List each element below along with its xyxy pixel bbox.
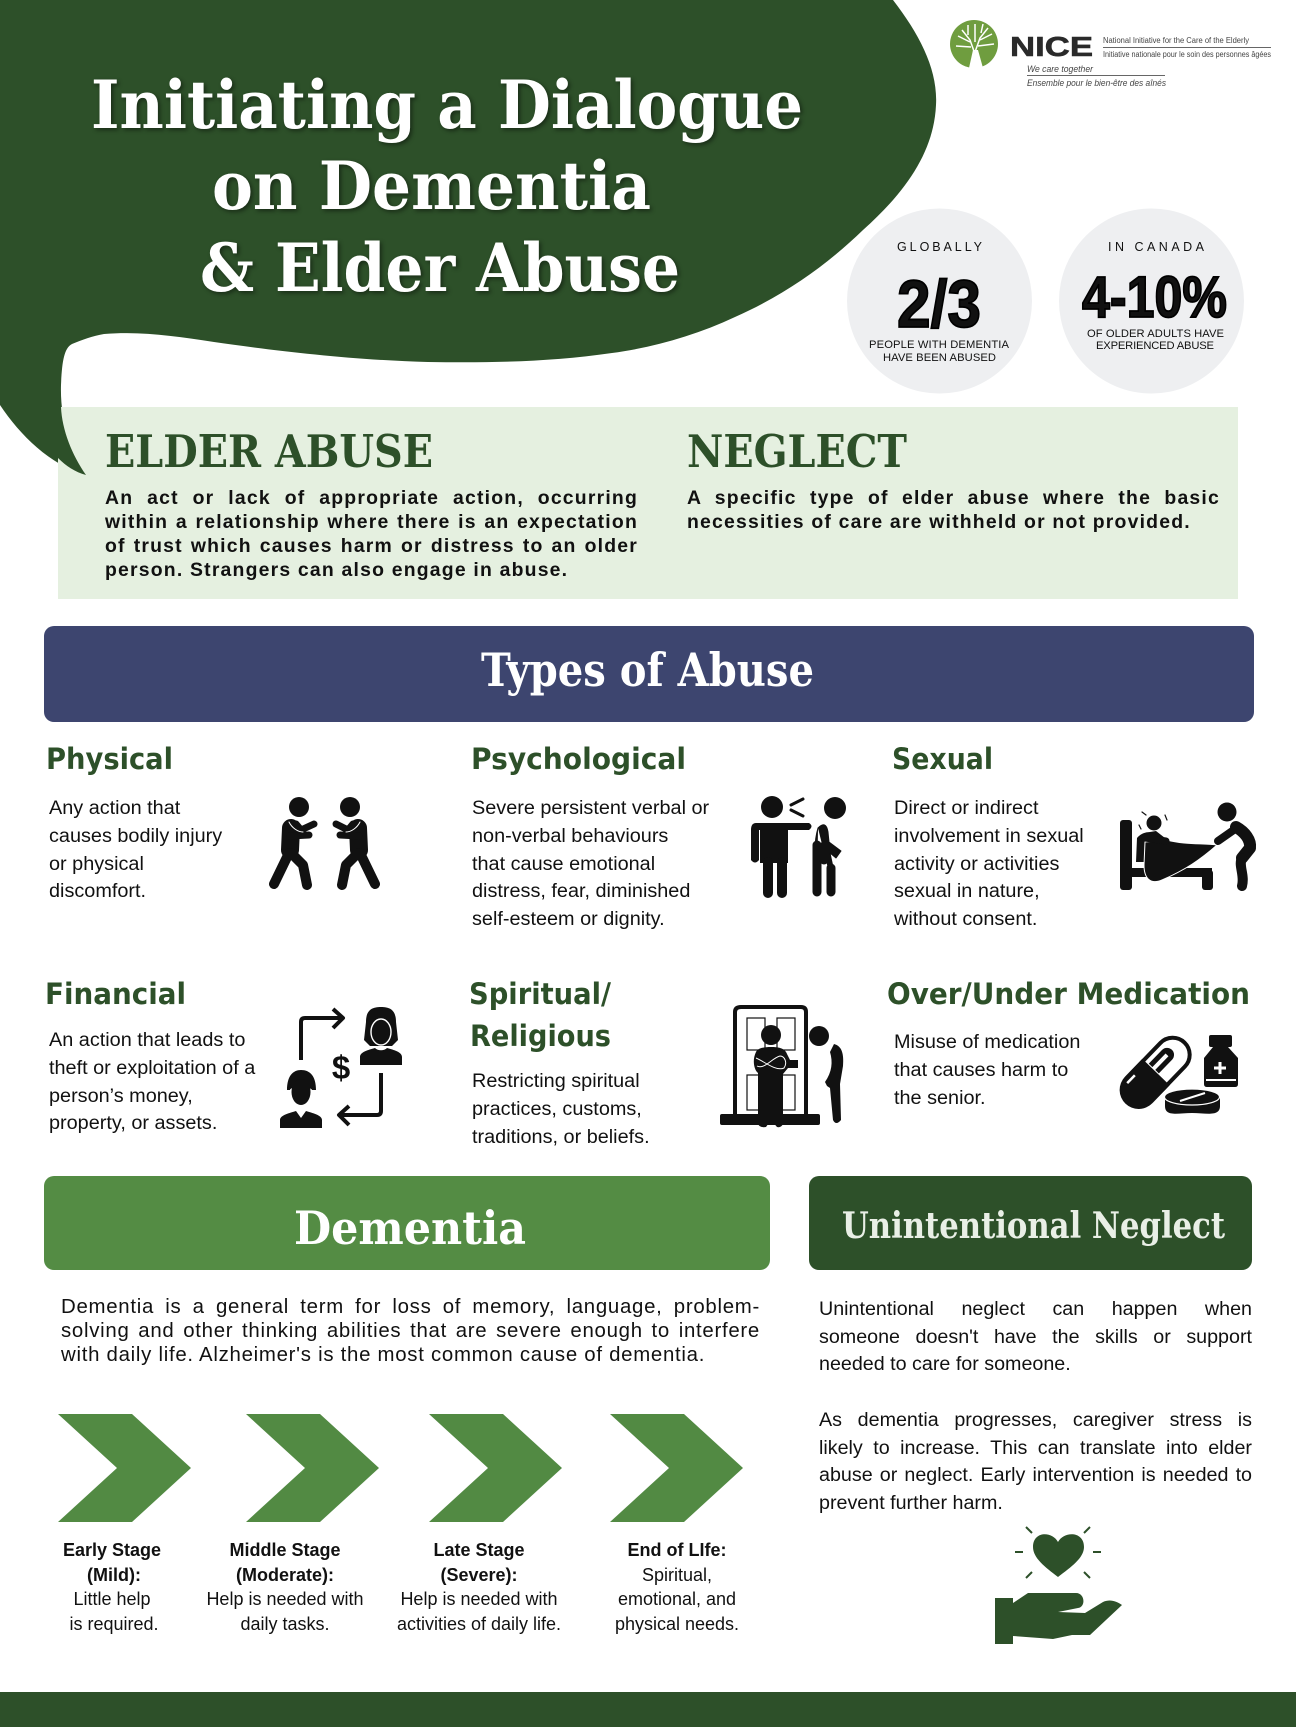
text: neglect definition: A specific type of elder abuse where the basic <box>687 487 1220 509</box>
text: physical: Any action that <box>49 797 180 819</box>
NICE logo: Initiative nationale pour le soin des personnes âgées <box>1103 50 1271 59</box>
stat circle: in Canada: OF OLDER ADULTS HAVE <box>1087 328 1224 340</box>
NICE logo <box>950 20 1271 88</box>
NICE logo: Ensemble pour le bien-être des aînés <box>1027 78 1166 88</box>
dementia banner <box>44 1176 770 1270</box>
stage: end of life: End of LIfe: <box>628 1540 726 1560</box>
text: spiritual <box>472 1070 650 1148</box>
heading: over/under medication: Over/Under Medication <box>887 977 1250 1011</box>
heading: physical: Physical <box>46 742 173 776</box>
text: unintentional neglect <box>819 1298 1252 1514</box>
stage: middle: Help is needed with <box>206 1589 364 1609</box>
text: physical: discomfort. <box>49 880 146 902</box>
text: sexual: activity or activities <box>894 853 1059 875</box>
stage: early <box>63 1540 161 1634</box>
stage: late: Help is needed with <box>400 1589 558 1609</box>
text: unintentional neglect: needed to care for someone. <box>819 1353 1071 1375</box>
text: elder abuse definition: person. Strangers can also engage in abuse. <box>105 559 568 581</box>
text: sexual: without consent. <box>894 908 1037 930</box>
text: financial: property, or assets. <box>49 1112 217 1134</box>
heading: psychological: Psychological <box>471 742 686 776</box>
arrow: late stage <box>429 1414 562 1522</box>
text: physical <box>49 797 222 902</box>
text: psychological: self-esteem or dignity. <box>472 908 665 930</box>
footer band <box>0 1692 1296 1727</box>
stat circle: globally: 2/3 <box>897 267 981 342</box>
arrow: end of life <box>610 1414 743 1522</box>
title: on Dementia <box>212 147 651 225</box>
text: elder abuse definition: An act or lack of appropriate action, occurring <box>105 487 638 509</box>
title: & Elder Abuse <box>200 229 680 307</box>
heading: spiritual / religious <box>469 977 611 1053</box>
text: spiritual: Restricting spiritual <box>472 1070 640 1092</box>
stat circle: globally: PEOPLE WITH DEMENTIA <box>869 339 1010 351</box>
text: elder abuse definition: of trust which causes harm or distress to an older <box>105 535 638 557</box>
heading: financial: Financial <box>45 977 186 1011</box>
types of abuse banner: Types of Abuse <box>481 643 814 697</box>
text: financial <box>49 1029 256 1134</box>
stage: late: activities of daily life. <box>397 1614 561 1634</box>
text: spiritual: traditions, or beliefs. <box>472 1126 650 1148</box>
text: physical: or physical <box>49 853 144 875</box>
heading: neglect: NEGLECT <box>687 425 907 478</box>
icon: person shouting at another <box>751 796 846 893</box>
arrow: early stage <box>58 1414 191 1522</box>
definitions panel background <box>58 407 1238 599</box>
icon: heart above open hand <box>995 1527 1122 1644</box>
text: financial: An action that leads to <box>49 1029 245 1051</box>
stat circle: in Canada: EXPERIENCED ABUSE <box>1096 340 1214 352</box>
stat circle: globally: GLOBALLY <box>897 240 983 254</box>
stage: middle: daily tasks. <box>240 1614 330 1634</box>
text: unintentional neglect: abuse or neglect. Early intervention is needed to <box>819 1464 1252 1486</box>
text: medication: the senior. <box>894 1087 986 1109</box>
text: dementia definition <box>61 1296 760 1366</box>
text: unintentional neglect: prevent further harm. <box>819 1492 1003 1514</box>
speech bubble header shape <box>0 0 936 475</box>
heading: elder abuse: ELDER ABUSE <box>105 425 433 478</box>
text: psychological: distress, fear, diminished <box>472 880 690 902</box>
stage: end of life: emotional, and <box>618 1589 736 1609</box>
dementia banner: Dementia <box>294 1201 526 1255</box>
stage: middle: (Moderate): <box>236 1565 334 1585</box>
text: sexual: involvement in sexual <box>894 825 1084 847</box>
stat circle: in Canada: 4-10% <box>1082 265 1227 330</box>
text: unintentional neglect: someone doesn't have the skills or support <box>819 1326 1252 1348</box>
text: dementia definition: Dementia is a general term for loss of memory, language, problem- <box>61 1296 760 1318</box>
text: neglect definition <box>687 487 1220 533</box>
heading: spiritual / religious: Spiritual/ <box>469 977 611 1011</box>
stage: late <box>397 1540 561 1634</box>
icon: person blocking door <box>720 1007 843 1127</box>
stage: early: (Mild): <box>87 1565 141 1585</box>
stage: end of life <box>615 1540 739 1634</box>
icon: two people fighting <box>274 797 375 885</box>
text: unintentional neglect: Unintentional neglect can happen when <box>819 1298 1252 1320</box>
text: dementia definition: with daily life. Alzheimer's is the most common cause of dementia. <box>61 1344 705 1366</box>
text: psychological: Severe persistent verbal or <box>472 797 709 819</box>
text: psychological <box>472 797 709 930</box>
NICE logo: We care together <box>1027 64 1094 74</box>
text: financial: person’s money, <box>49 1085 193 1107</box>
text: sexual <box>894 797 1084 930</box>
text: unintentional neglect: As dementia progresses, caregiver stress is <box>819 1409 1252 1431</box>
text: sexual: sexual in nature, <box>894 880 1040 902</box>
stage: late: (Severe): <box>440 1565 518 1585</box>
text: medication: Misuse of medication <box>894 1031 1080 1053</box>
speech bubble tail overlap <box>58 407 86 475</box>
icon: money exchange between two people: $ <box>332 1049 350 1086</box>
stage: middle <box>206 1540 364 1634</box>
unintentional neglect banner <box>809 1176 1252 1270</box>
types of abuse banner <box>44 626 1254 722</box>
icon: person in bed with blanket pulled <box>1120 802 1250 890</box>
text: sexual: Direct or indirect <box>894 797 1038 819</box>
text: physical: causes bodily injury <box>49 825 222 847</box>
text: psychological: that cause emotional <box>472 853 655 875</box>
heading: spiritual / religious: Religious <box>470 1019 611 1053</box>
text: medication <box>894 1031 1080 1109</box>
icon: medication pill bottle and tablet <box>1112 1029 1238 1117</box>
text: elder abuse definition <box>105 487 638 581</box>
NICE logo: NICE <box>1010 31 1093 62</box>
stat circle: in Canada <box>1059 208 1244 394</box>
text: financial: theft or exploitation of a <box>49 1057 255 1079</box>
unintentional neglect banner: Unintentional Neglect <box>842 1205 1225 1247</box>
text: neglect definition: necessities of care are withheld or not provided. <box>687 511 1191 533</box>
NICE logo: National Initiative for the Care of the Elderly <box>1103 36 1249 45</box>
heading: sexual: Sexual <box>892 742 993 776</box>
title: Initiating a Dialogue <box>91 66 803 144</box>
text: medication: that causes harm to <box>894 1059 1068 1081</box>
stage: late: Late Stage <box>433 1540 525 1560</box>
stat circle: in Canada: IN CANADA <box>1108 240 1205 254</box>
text: spiritual: practices, customs, <box>472 1098 642 1120</box>
stage: early: Little help <box>73 1589 151 1609</box>
text: unintentional neglect: likely to increase. This can translate into elder <box>819 1437 1252 1459</box>
stage: middle: Middle Stage <box>229 1540 340 1560</box>
text: psychological: non-verbal behaviours <box>472 825 668 847</box>
title <box>91 66 803 307</box>
arrow: middle stage <box>246 1414 379 1522</box>
stat circle: globally: HAVE BEEN ABUSED <box>883 352 996 364</box>
stage: end of life: physical needs. <box>615 1614 739 1634</box>
stage: early: Early Stage <box>63 1540 161 1560</box>
icon: money exchange between two people <box>280 1007 402 1128</box>
text: dementia definition: solving and other thinking abilities that are severe enough to interfere <box>61 1320 760 1342</box>
stage: end of life: Spiritual, <box>642 1565 712 1585</box>
stat circle: globally <box>847 208 1032 394</box>
stage: early: is required. <box>69 1614 159 1634</box>
text: elder abuse definition: within a relationship where there is an expectation <box>105 511 638 533</box>
